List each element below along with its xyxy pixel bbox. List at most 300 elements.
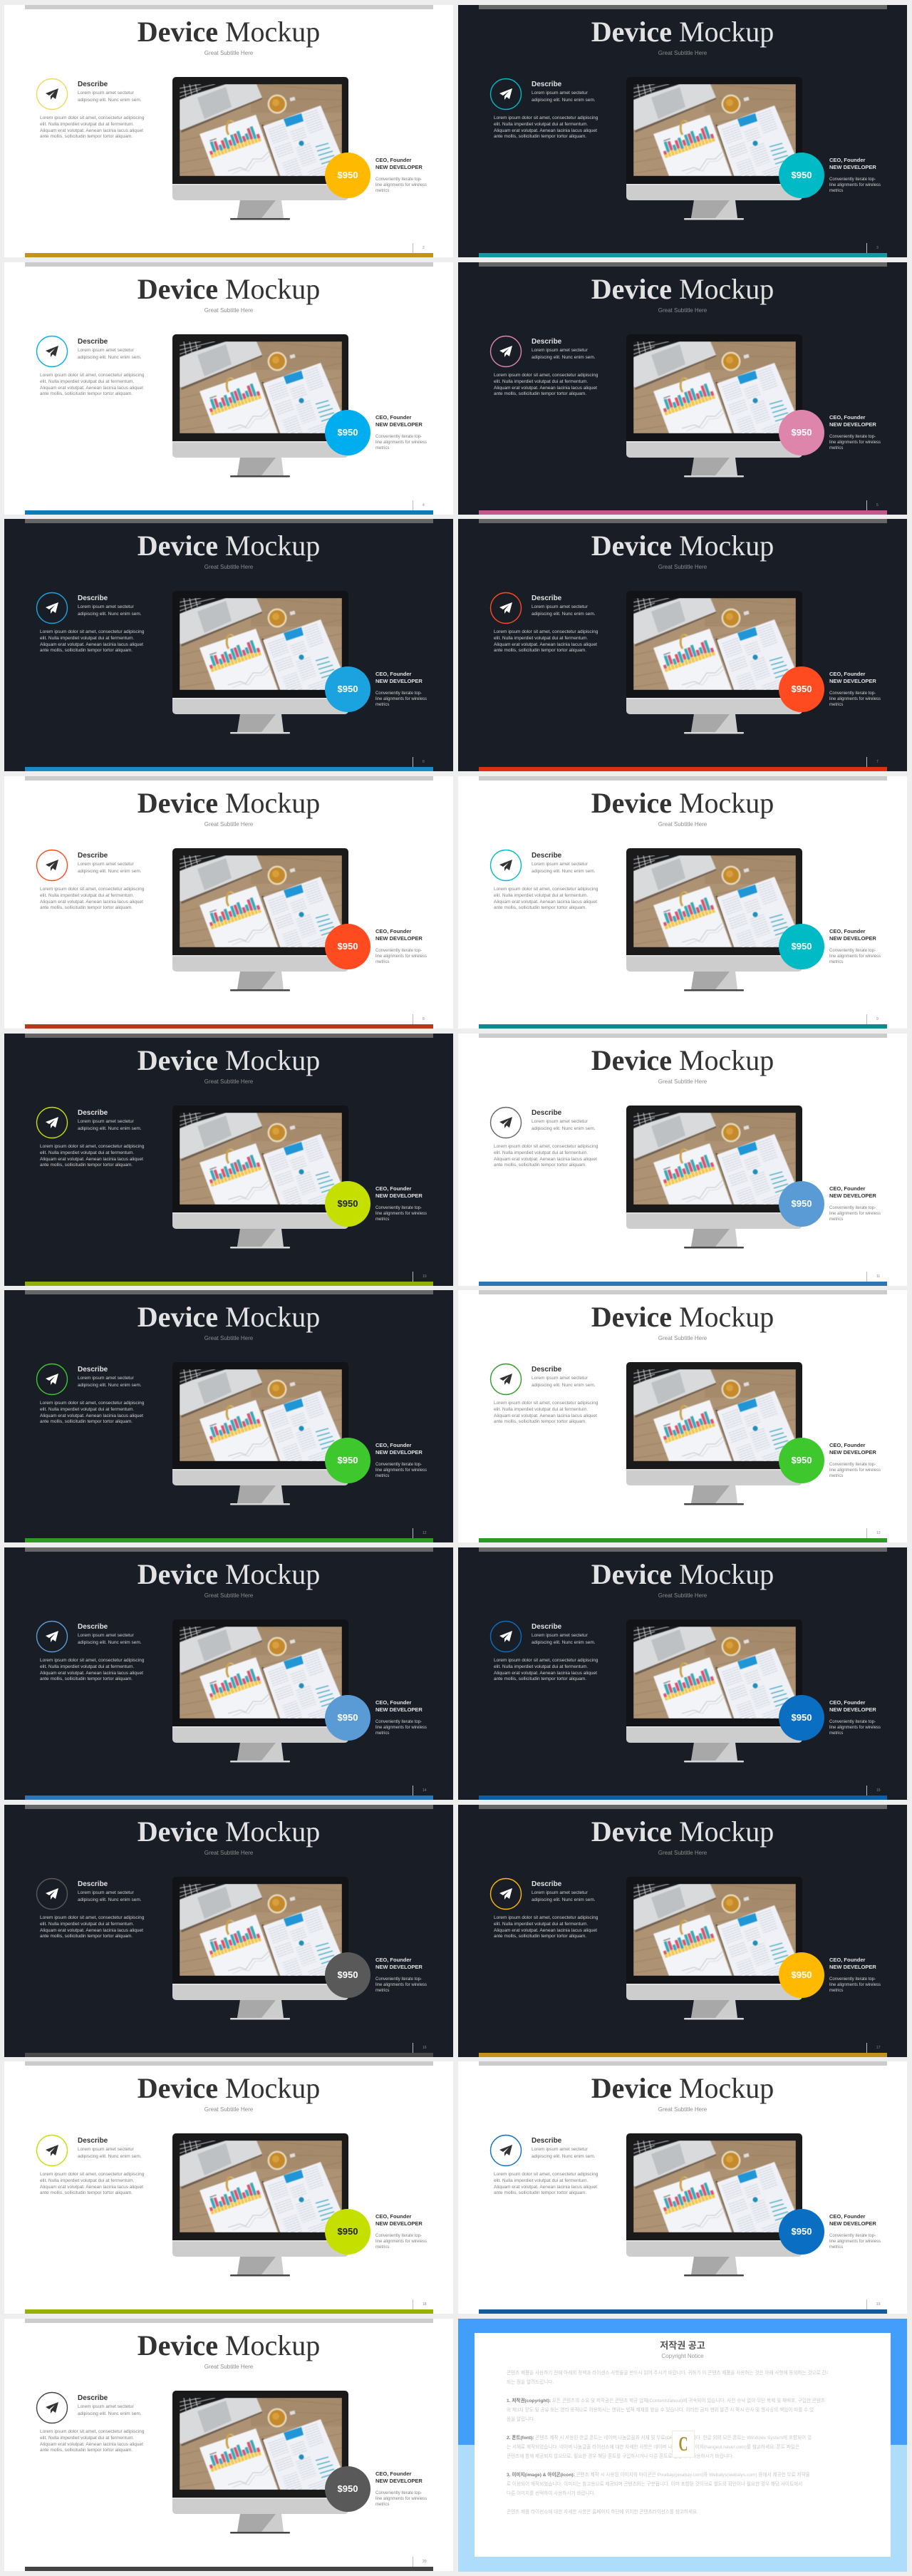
role text: CEO, Founder <box>375 928 411 934</box>
body paragraph: Lorem ipsum dolor sit amet, consectetur adipiscing <box>494 1915 598 1920</box>
price circle <box>779 410 824 455</box>
role text: Conveniently iterate top- <box>829 691 876 696</box>
body paragraph: elit. Nulla imperdiet volutpat dui at fermentum. <box>494 379 588 384</box>
describe text: adipiscing elit. Nunc enim sem. <box>532 1383 596 1388</box>
describe text: Lorem ipsum amet sectetur <box>532 91 588 96</box>
body paragraph: elit. Nulla imperdiet volutpat dui at fermentum. <box>494 1407 588 1412</box>
subtitle: Great Subtitle Here <box>204 564 253 570</box>
describe text: Describe <box>78 1109 108 1117</box>
role text: Conveniently iterate top- <box>829 1977 876 1982</box>
describe text <box>78 1108 170 1133</box>
body paragraph <box>40 887 144 910</box>
body paragraph: Lorem ipsum dolor sit amet, consectetur adipiscing <box>40 373 144 378</box>
price circle <box>779 2209 824 2255</box>
role text: NEW DEVELOPER <box>375 1963 423 1970</box>
subtitle: Great Subtitle Here <box>658 1335 707 1341</box>
describe text <box>78 1880 170 1904</box>
body paragraph: Lorem ipsum dolor sit amet, consectetur adipiscing <box>40 629 144 634</box>
role text: line alignments for wireless <box>829 697 881 701</box>
role text: CEO, Founder <box>829 928 865 934</box>
page number <box>413 757 434 771</box>
body paragraph <box>494 887 608 912</box>
icon: paper plane badge <box>36 2134 68 2167</box>
page number <box>866 1786 888 1800</box>
body paragraph: elit. Nulla imperdiet volutpat dui at fermentum. <box>40 379 134 384</box>
describe text <box>532 338 596 360</box>
role text: CEO, Founder <box>375 1185 411 1192</box>
body paragraph <box>40 1401 154 1426</box>
body paragraph: elit. Nulla imperdiet volutpat dui at fermentum. <box>40 122 134 127</box>
describe text: Describe <box>532 1366 561 1374</box>
body paragraph: Lorem ipsum dolor sit amet, consectetur adipiscing <box>494 373 598 378</box>
price circle: $950 <box>792 941 812 952</box>
body paragraph: Aliquam erat volutpat. Aenean lacinia lacus aliquet <box>40 1671 143 1676</box>
body paragraph: ante mollis, sollicitudin tempor tortor aliquam. <box>494 2190 586 2195</box>
subtitle: Great Subtitle Here <box>658 2106 707 2113</box>
icon: paper plane badge <box>36 78 68 110</box>
price circle: $950 <box>338 170 358 180</box>
body paragraph: ante mollis, sollicitudin tempor tortor aliquam. <box>40 2448 133 2453</box>
role text: line alignments for wireless <box>829 1726 881 1730</box>
describe text: adipiscing elit. Nunc enim sem. <box>78 869 142 874</box>
describe text <box>532 1365 624 1389</box>
device monitor <box>626 1619 802 1763</box>
icon: paper plane badge <box>490 592 522 624</box>
body paragraph: elit. Nulla imperdiet volutpat dui at fermentum. <box>494 893 588 898</box>
price circle <box>325 410 370 455</box>
role text: metrics <box>829 446 843 450</box>
device monitor <box>172 2391 348 2535</box>
role text: metrics <box>829 1989 843 1993</box>
panel: slide 13 green light <box>458 1290 907 1542</box>
describe text: Lorem ipsum amet sectetur <box>78 2404 134 2409</box>
body paragraph <box>494 1144 608 1169</box>
role text: line alignments for wireless <box>829 1212 881 1216</box>
describe text: Describe <box>532 2137 561 2145</box>
describe text: Lorem ipsum amet sectetur <box>78 91 134 96</box>
icon: paper plane badge <box>36 1106 68 1139</box>
describe text: adipiscing elit. Nunc enim sem. <box>532 1126 596 1131</box>
closing note: 콘텐츠 제품 라이선스에 대한 자세한 사항은 홈페이지 하단에 위치한 콘텐츠라이선스를 참고하세요. <box>507 2510 698 2515</box>
panel: slide 12 green dark <box>4 1290 453 1542</box>
icon: paper plane badge <box>36 1363 68 1396</box>
role text: metrics <box>375 446 389 450</box>
role text: line alignments for wireless <box>829 1983 881 1987</box>
price circle: $950 <box>338 1455 358 1465</box>
describe text: Describe <box>78 2137 108 2145</box>
page number <box>866 1528 888 1542</box>
price circle: $950 <box>338 941 358 952</box>
body paragraph: elit. Nulla imperdiet volutpat dui at fermentum. <box>494 1922 588 1927</box>
page number: 5 <box>876 503 879 508</box>
describe text <box>78 81 142 103</box>
copyright clause line two: 의 제3자 양도 및 공유 또는 영리 목적으로 이용하시는 행위는 법적 제재를 받을 수 있습니다. 이러한 금지 행위 발견 시 즉시 민사 및 형사상의 책임이 따를 수 있 <box>507 2408 814 2413</box>
price circle <box>325 924 370 969</box>
body paragraph: elit. Nulla imperdiet volutpat dui at fermentum. <box>494 2178 588 2183</box>
body paragraph: elit. Nulla imperdiet volutpat dui at fermentum. <box>40 1407 134 1412</box>
panel: slide 20 gray light <box>4 2319 453 2571</box>
describe text: Lorem ipsum amet sectetur <box>78 1376 134 1381</box>
price circle <box>779 1181 824 1227</box>
body paragraph: elit. Nulla imperdiet volutpat dui at fermentum. <box>494 122 588 127</box>
describe text <box>78 594 142 617</box>
describe text: Describe <box>532 1623 561 1631</box>
describe text: Describe <box>78 338 108 346</box>
page number: 17 <box>876 2046 881 2050</box>
subtitle: Great Subtitle Here <box>658 307 707 314</box>
device monitor <box>626 591 802 734</box>
role text: metrics <box>375 1731 389 1736</box>
icon: paper plane badge <box>489 1106 522 1139</box>
body paragraph <box>494 1401 608 1426</box>
body paragraph: elit. Nulla imperdiet volutpat dui at fermentum. <box>40 636 134 641</box>
describe text <box>532 851 624 875</box>
role text <box>375 2471 447 2508</box>
body paragraph: Lorem ipsum dolor sit amet, consectetur adipiscing <box>40 887 144 892</box>
describe text: Describe <box>532 338 561 346</box>
role text: Conveniently iterate top- <box>829 177 876 182</box>
copyright clause: 1. 저작권(copyright): 모든 콘텐츠의 소유 및 저작권은 콘텐츠 제공 업체(Contentsfabout)에 귀속되어 있습니다. 사전 승낙 없이 무단 복제 및 재배포, 구입한 콘텐츠 <box>507 2399 825 2404</box>
describe text: Lorem ipsum amet sectetur <box>532 1376 588 1381</box>
role text: CEO, Founder <box>375 2471 411 2477</box>
title: Device Mockup <box>138 530 320 562</box>
panel: slide 16 gray dark <box>4 1805 453 2057</box>
price circle: $950 <box>338 2226 358 2237</box>
body paragraph <box>40 2172 154 2197</box>
describe text <box>78 1622 170 1647</box>
icon: paper plane badge <box>36 592 68 624</box>
page number: 7 <box>876 760 879 764</box>
page number <box>866 243 888 257</box>
image clause: 3. 이미지(image) & 아이콘(icon): 콘텐츠 제작 시 사용된 이미지와 아이콘은 Pixabay(pixabay.com)와 Webalys(webalys.com) 등에서 제공한 무료 저작물 <box>507 2473 810 2478</box>
body paragraph: ante mollis, sollicitudin tempor tortor aliquam. <box>40 1163 133 1168</box>
body paragraph <box>494 2172 608 2197</box>
describe text: adipiscing elit. Nunc enim sem. <box>78 612 142 617</box>
describe text <box>532 594 596 617</box>
device monitor <box>626 848 802 992</box>
role text: metrics <box>375 1217 389 1222</box>
role text: metrics <box>375 1989 389 1993</box>
role text: line alignments for wireless <box>375 1212 427 1216</box>
panel: slide 18 lime light <box>4 2061 453 2314</box>
describe text: Lorem ipsum amet sectetur <box>78 862 134 867</box>
price circle <box>325 1438 370 1483</box>
body paragraph: ante mollis, sollicitudin tempor tortor aliquam. <box>494 1163 586 1168</box>
role text: Conveniently iterate top- <box>375 949 422 953</box>
body paragraph <box>494 1915 608 1940</box>
font clause line three: 콘텐츠에 함께 제공되지 않으므로, 필요한 경우 해당 폰트를 구입하시거나 다른 폰트로 변경하여 사용하시기 바랍니다. <box>507 2454 734 2459</box>
role text: metrics <box>375 189 389 193</box>
role text: NEW DEVELOPER <box>375 421 423 428</box>
role text: Conveniently iterate top- <box>375 691 422 696</box>
page number: 11 <box>876 1274 880 1279</box>
body paragraph <box>40 629 144 653</box>
logo: C mark <box>672 2431 695 2458</box>
role text: metrics <box>375 2245 389 2250</box>
page number <box>413 2299 434 2314</box>
role text <box>375 1185 447 1222</box>
page number: 19 <box>876 2302 881 2307</box>
role text: metrics <box>829 189 843 193</box>
role text: Conveniently iterate top- <box>829 949 876 953</box>
price circle <box>325 1695 370 1741</box>
role text: metrics <box>829 1474 843 1478</box>
role text <box>375 1957 447 1994</box>
title: Device Mockup <box>591 1558 774 1590</box>
device monitor <box>626 77 802 220</box>
body paragraph: Lorem ipsum dolor sit amet, consectetur adipiscing <box>494 1144 598 1149</box>
role text: CEO, Founder <box>829 2213 865 2220</box>
describe text <box>532 1880 624 1904</box>
body paragraph: Aliquam erat volutpat. Aenean lacinia lacus aliquet <box>40 2442 143 2447</box>
body paragraph: Lorem ipsum dolor sit amet, consectetur adipiscing <box>40 1144 144 1149</box>
title: Device Mockup <box>591 1301 774 1333</box>
role text: line alignments for wireless <box>375 1726 427 1730</box>
price circle: $950 <box>792 170 812 180</box>
body paragraph: ante mollis, sollicitudin tempor tortor aliquam. <box>40 1419 133 1424</box>
describe text: Describe <box>78 81 108 88</box>
body paragraph: Aliquam erat volutpat. Aenean lacinia lacus aliquet <box>494 1928 597 1933</box>
price circle: $950 <box>338 427 358 438</box>
role text: CEO, Founder <box>829 671 865 677</box>
body paragraph: Aliquam erat volutpat. Aenean lacinia lacus aliquet <box>40 2185 143 2190</box>
role text: Conveniently iterate top- <box>829 1720 876 1724</box>
price circle: $950 <box>792 1969 812 1980</box>
icon: paper plane badge <box>489 849 522 882</box>
describe text: Lorem ipsum amet sectetur <box>78 2147 134 2152</box>
accent bar <box>25 767 433 771</box>
role text: CEO, Founder <box>829 1442 865 1448</box>
price circle <box>779 666 824 712</box>
body paragraph: elit. Nulla imperdiet volutpat dui at fermentum. <box>494 1150 588 1155</box>
body paragraph <box>494 115 598 139</box>
body paragraph <box>494 1658 608 1683</box>
role text: Conveniently iterate top- <box>829 435 876 439</box>
role text: CEO, Founder <box>375 414 411 421</box>
role text: CEO, Founder <box>829 1957 865 1963</box>
accent bar <box>479 1024 887 1029</box>
body paragraph: Lorem ipsum dolor sit amet, consectetur adipiscing <box>40 2172 144 2177</box>
body paragraph <box>40 373 144 396</box>
page number <box>413 500 434 515</box>
price circle: $950 <box>338 1198 358 1209</box>
role text: CEO, Founder <box>375 1957 411 1963</box>
body paragraph: elit. Nulla imperdiet volutpat dui at fermentum. <box>40 2436 134 2441</box>
price circle <box>325 2466 370 2512</box>
icon: paper plane badge <box>489 1620 522 1653</box>
role text: line alignments for wireless <box>375 183 427 187</box>
device monitor <box>172 77 348 220</box>
role text <box>829 1442 901 1479</box>
role text: NEW DEVELOPER <box>375 2220 423 2227</box>
page number <box>866 500 888 515</box>
role text: line alignments for wireless <box>829 1468 881 1473</box>
title: Device Mockup <box>138 2329 320 2361</box>
price circle: $950 <box>792 1712 812 1723</box>
page number <box>866 757 888 771</box>
role text: Conveniently iterate top- <box>375 1720 422 1724</box>
body paragraph: Aliquam erat volutpat. Aenean lacinia lacus aliquet <box>494 386 597 391</box>
role text <box>375 2213 447 2250</box>
device monitor <box>172 848 348 992</box>
icon: paper plane badge <box>36 1877 68 1910</box>
price circle: $950 <box>338 2483 358 2494</box>
describe text: adipiscing elit. Nunc enim sem. <box>532 1897 596 1902</box>
body paragraph: elit. Nulla imperdiet volutpat dui at fermentum. <box>40 893 134 898</box>
role text: NEW DEVELOPER <box>829 677 876 684</box>
title: Device Mockup <box>591 1815 774 1848</box>
describe text <box>532 81 596 103</box>
subtitle: Great Subtitle Here <box>658 564 707 570</box>
role text: Conveniently iterate top- <box>375 2234 422 2238</box>
role text <box>829 671 881 707</box>
body paragraph: ante mollis, sollicitudin tempor tortor aliquam. <box>40 1676 133 1681</box>
role text: Conveniently iterate top- <box>375 177 422 182</box>
accent bar <box>25 2567 433 2571</box>
icon: paper plane badge <box>489 1877 522 1910</box>
page number: 12 <box>423 1531 427 1535</box>
role text: NEW DEVELOPER <box>375 164 423 170</box>
subtitle: Great Subtitle Here <box>204 50 253 56</box>
describe text: adipiscing elit. Nunc enim sem. <box>532 612 596 617</box>
body paragraph: Lorem ipsum dolor sit amet, consectetur adipiscing <box>494 2172 598 2177</box>
font clause line two: 는 서체로 제작되었습니다. 네이버 나눔글꼴 라이선스에 대한 자세한 사항은 네이버 나눔글꼴 홈페이지(hangeul.naver.com)를 참고하세요. 폰트 파일은 <box>507 2445 799 2450</box>
price circle <box>325 153 370 198</box>
body paragraph <box>40 2429 154 2454</box>
price circle <box>779 1438 824 1483</box>
body paragraph: elit. Nulla imperdiet volutpat dui at fermentum. <box>40 1922 134 1927</box>
role text <box>375 671 427 707</box>
describe text: Describe <box>78 1880 108 1888</box>
describe text: Lorem ipsum amet sectetur <box>78 1890 134 1895</box>
device monitor <box>626 1362 802 1506</box>
accent bar <box>479 1282 887 1286</box>
title: Device Mockup <box>591 530 774 562</box>
title: Device Mockup <box>591 787 774 819</box>
role text: line alignments for wireless <box>829 441 881 445</box>
body paragraph: Lorem ipsum dolor sit amet, consectetur adipiscing <box>494 887 598 892</box>
page number: 9 <box>876 1017 879 1021</box>
device monitor <box>172 1362 348 1506</box>
panel: slide 19 navy blue light <box>458 2061 907 2314</box>
panel: slide 5 pink dark <box>458 262 907 515</box>
role text: line alignments for wireless <box>829 2240 881 2244</box>
role text <box>829 2213 901 2250</box>
role text: metrics <box>829 960 843 964</box>
title: Device Mockup <box>591 1044 774 1076</box>
body paragraph: elit. Nulla imperdiet volutpat dui at fermentum. <box>40 1664 134 1669</box>
accent bar <box>479 2309 887 2314</box>
role text: Conveniently iterate top- <box>829 1463 876 1467</box>
body paragraph: Aliquam erat volutpat. Aenean lacinia lacus aliquet <box>494 900 597 905</box>
page number <box>413 1014 434 1029</box>
role text: NEW DEVELOPER <box>375 2478 423 2483</box>
role text: Conveniently iterate top- <box>375 1977 422 1982</box>
subtitle: Great Subtitle Here <box>204 2106 253 2113</box>
accent bar <box>479 767 887 771</box>
role text: CEO, Founder <box>375 1442 411 1448</box>
title: Device Mockup <box>591 273 774 305</box>
accent bar <box>479 2053 887 2057</box>
accent bar <box>25 1538 433 1542</box>
icon: paper plane badge <box>36 2391 68 2424</box>
device monitor <box>172 334 348 478</box>
device monitor <box>172 1877 348 2021</box>
body paragraph: Aliquam erat volutpat. Aenean lacinia lacus aliquet <box>40 900 143 905</box>
price circle <box>325 2209 370 2255</box>
role text: metrics <box>375 960 389 964</box>
body paragraph: Aliquam erat volutpat. Aenean lacinia lacus aliquet <box>494 2185 597 2190</box>
role text: CEO, Founder <box>829 414 865 421</box>
font clause: 2. 폰트(font): 콘텐츠 제작 시 사용된 한글 폰트는 네이버 나눔글꼴과 서체 및 무료(OFL) 폰트입니다. 한글 외의 모든 폰트는 Windows System에 포함되어 있 <box>507 2436 812 2441</box>
body paragraph: ante mollis, sollicitudin tempor tortor aliquam. <box>494 648 586 653</box>
accent bar <box>25 1796 433 1800</box>
page number <box>866 2299 888 2314</box>
role text: line alignments for wireless <box>375 2497 427 2501</box>
describe text: Lorem ipsum amet sectetur <box>78 604 134 609</box>
role text: NEW DEVELOPER <box>829 421 876 428</box>
price circle <box>325 666 370 712</box>
body paragraph: Lorem ipsum dolor sit amet, consectetur adipiscing <box>40 115 144 120</box>
describe text: Lorem ipsum amet sectetur <box>532 862 588 867</box>
body paragraph: Lorem ipsum dolor sit amet, consectetur adipiscing <box>40 2429 144 2434</box>
describe text: adipiscing elit. Nunc enim sem. <box>532 1640 596 1645</box>
role text: Conveniently iterate top- <box>375 435 422 439</box>
notice heading: 저작권 공고 <box>660 2340 705 2351</box>
device monitor <box>172 591 348 734</box>
body paragraph: Lorem ipsum dolor sit amet, consectetur adipiscing <box>494 629 598 634</box>
page number: 8 <box>423 1017 425 1021</box>
role text: line alignments for wireless <box>829 183 881 187</box>
title: Device Mockup <box>138 16 320 48</box>
title: Device Mockup <box>138 1044 320 1076</box>
role text: NEW DEVELOPER <box>375 1448 423 1456</box>
body paragraph: ante mollis, sollicitudin tempor tortor aliquam. <box>494 391 586 396</box>
subtitle: Great Subtitle Here <box>204 307 253 314</box>
page number <box>413 1272 434 1286</box>
role text <box>829 1185 901 1222</box>
image clause line two: 로 이용되어 제작되었습니다. 이미지는 참고용으로 제공되며 콘텐츠와는 구분됩니다. 이미 포함된 것이므로 별도의 확인이나 필요한 경우 해당 사이트에서 <box>507 2482 802 2487</box>
title: Device Mockup <box>138 2072 320 2104</box>
logo: C mark: C <box>678 2433 688 2456</box>
title: Device Mockup <box>138 1558 320 1590</box>
subtitle: Great Subtitle Here <box>658 50 707 56</box>
body paragraph: elit. Nulla imperdiet volutpat dui at fermentum. <box>40 1150 134 1155</box>
page number <box>866 1014 888 1029</box>
body paragraph <box>40 1658 154 1683</box>
body paragraph <box>494 629 598 653</box>
body paragraph: Aliquam erat volutpat. Aenean lacinia lacus aliquet <box>40 1157 143 1162</box>
subtitle: Great Subtitle Here <box>658 1850 707 1856</box>
price circle: $950 <box>792 2226 812 2237</box>
page number <box>413 2557 434 2571</box>
body paragraph: ante mollis, sollicitudin tempor tortor aliquam. <box>40 648 133 653</box>
describe text: Lorem ipsum amet sectetur <box>78 348 134 353</box>
body paragraph: elit. Nulla imperdiet volutpat dui at fermentum. <box>494 636 588 641</box>
body paragraph: elit. Nulla imperdiet volutpat dui at fermentum. <box>494 1664 588 1669</box>
device monitor <box>172 1106 348 1250</box>
describe text: Lorem ipsum amet sectetur <box>78 1119 134 1124</box>
role text: CEO, Founder <box>829 157 865 163</box>
body paragraph: Lorem ipsum dolor sit amet, consectetur adipiscing <box>494 115 598 120</box>
accent bar <box>25 510 433 515</box>
panel: slide 11 steel blue light <box>458 1034 907 1286</box>
image clause line three: 다른 이미지를 선택하여 사용하시기 바랍니다. <box>507 2491 595 2496</box>
describe text <box>78 1365 170 1389</box>
page number: 16 <box>423 2046 427 2050</box>
describe text: adipiscing elit. Nunc enim sem. <box>78 1383 142 1388</box>
icon: paper plane badge <box>489 1363 522 1396</box>
